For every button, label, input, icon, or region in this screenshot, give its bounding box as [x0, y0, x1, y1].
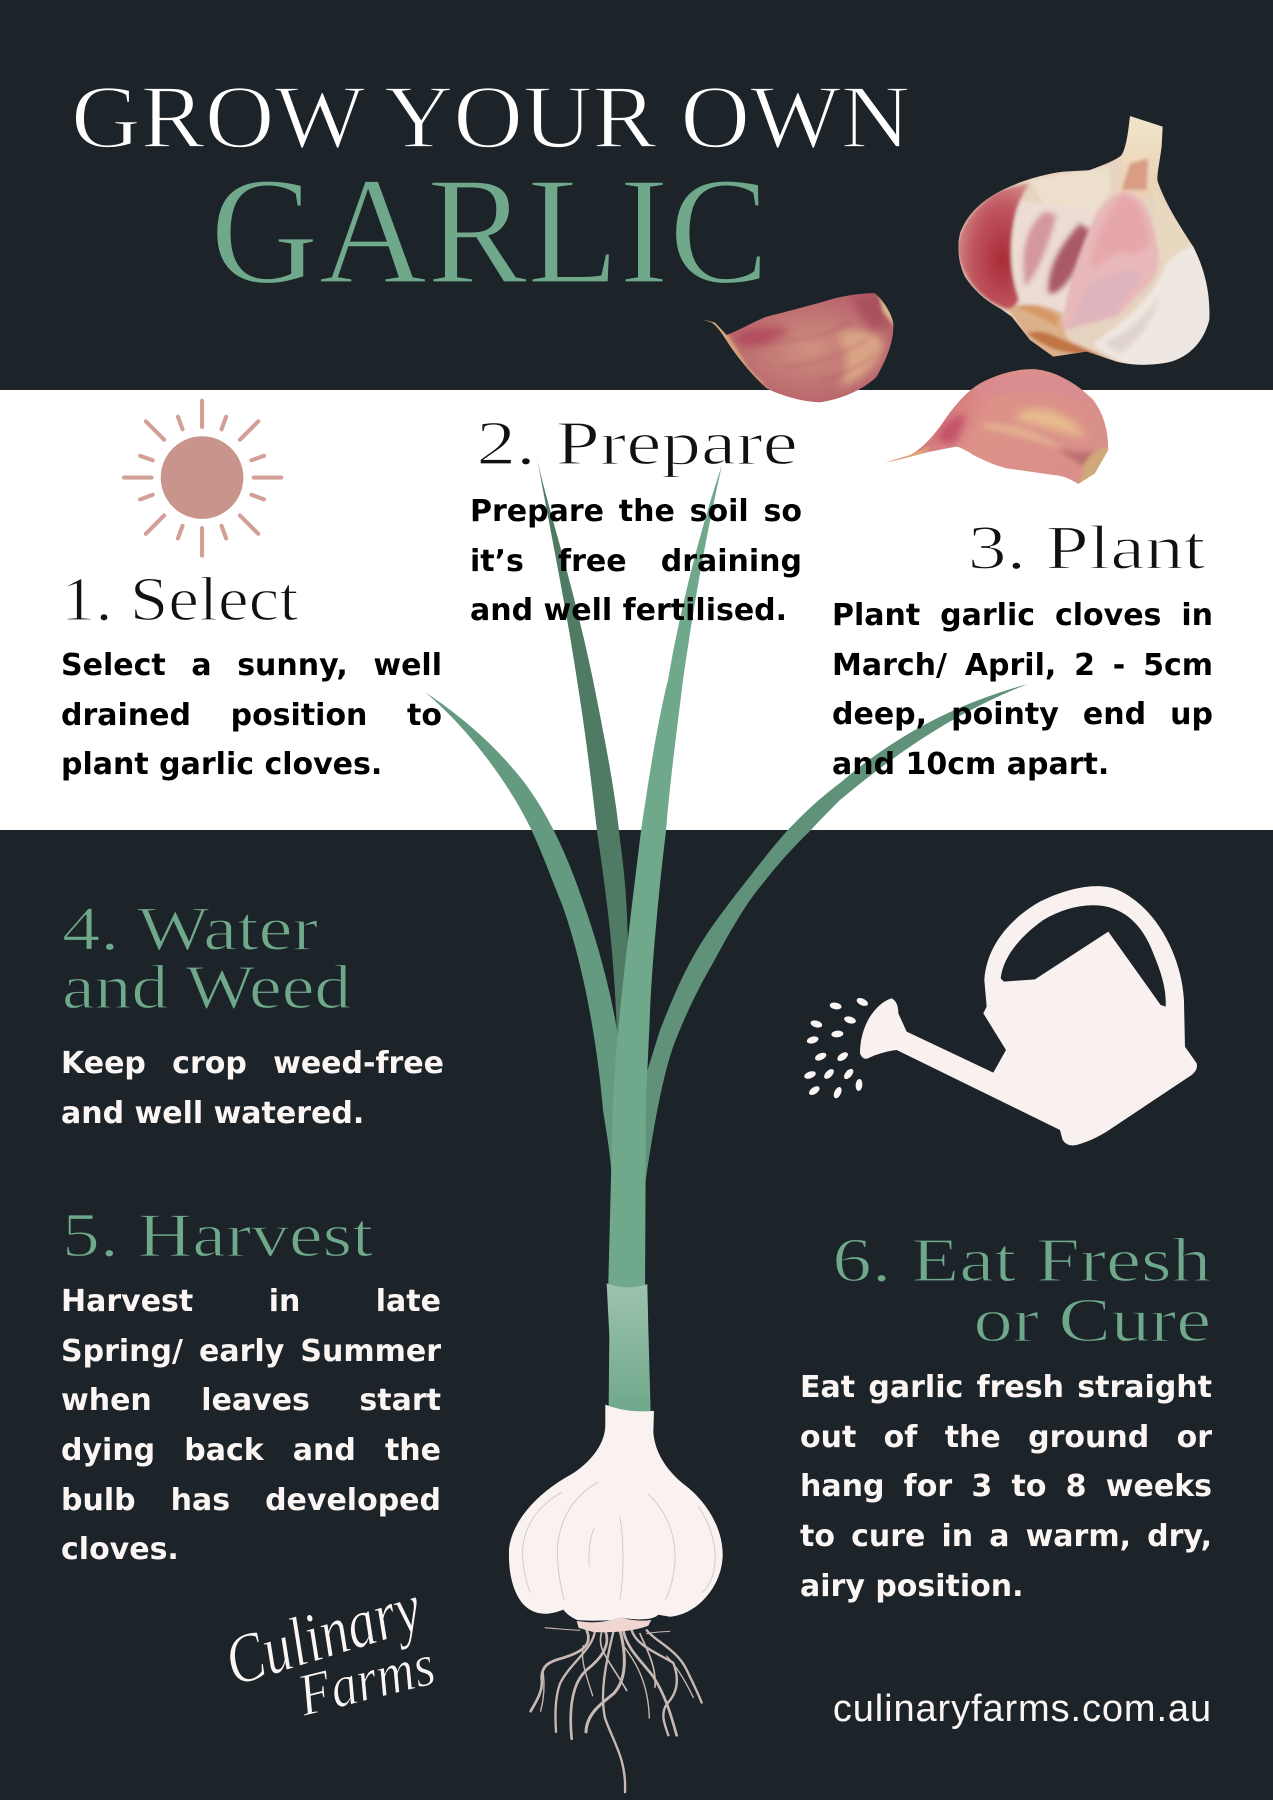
- title: [71, 68, 910, 316]
- text: step 2: it’s free draining: [470, 544, 802, 579]
- photo: left clove: [703, 293, 894, 402]
- logo: culinary farms script: Culinary: [216, 1569, 431, 1701]
- heading: water and weed: 4. Water: [62, 895, 318, 963]
- heading: harvest: 5. Harvest: [62, 1202, 373, 1270]
- heading: water and weed: [62, 895, 351, 1022]
- photo: garlic head: [958, 116, 1210, 365]
- icon: sun: [124, 401, 281, 556]
- text: step 2: Prepare the soil so: [470, 494, 802, 529]
- text: step 3: and 10cm apart.: [832, 747, 1109, 782]
- text: step 5: when leaves start: [61, 1383, 441, 1418]
- garlic plant leaves: [425, 457, 1028, 1295]
- step headings: [61, 410, 1211, 1355]
- text: step 6: out of the ground or: [800, 1420, 1212, 1455]
- text: step 6: hang for 3 to 8 weeks: [800, 1469, 1212, 1504]
- text: step 2: [470, 494, 802, 628]
- text: step 1: Select a sunny, well: [61, 648, 442, 683]
- heading: plant: 3. Plant: [968, 514, 1205, 582]
- text: step 5: dying back and the: [61, 1433, 441, 1468]
- text: step 5: Spring/ early Summer: [61, 1334, 441, 1369]
- text: step 5: cloves.: [61, 1532, 179, 1567]
- text: step 1: [61, 648, 442, 782]
- text: step 3: Plant garlic cloves in: [832, 598, 1213, 633]
- logo: culinary farms script: [216, 1569, 441, 1729]
- water drops: [803, 996, 869, 1099]
- garlic bulb with stem sleeve and roots: [509, 1283, 723, 1792]
- text: step 5: bulb has developed: [61, 1483, 441, 1518]
- photo: right clove: [885, 369, 1108, 484]
- text: step 6: [800, 1370, 1212, 1604]
- text: step 2: and well fertilised.: [470, 593, 787, 628]
- icon: watering can: [803, 886, 1197, 1145]
- text: step 6: Eat garlic fresh straight: [800, 1370, 1212, 1405]
- text: step 6: to cure in a warm, dry,: [800, 1519, 1212, 1554]
- text: step 4: Keep crop weed-free: [61, 1046, 444, 1081]
- title: GROW YOUR OWN: [71, 68, 910, 167]
- text: step 3: March/ April, 2 - 5cm: [832, 648, 1213, 683]
- text: step 1: drained position to: [61, 698, 442, 733]
- text: step 5: [61, 1284, 441, 1567]
- text: step 5: Harvest in late: [61, 1284, 441, 1319]
- heading: eat fresh or cure: [832, 1227, 1211, 1355]
- heading: select: 1. Select: [61, 566, 298, 634]
- text: step 3: [832, 598, 1213, 782]
- text: step 6: airy position.: [800, 1569, 1024, 1604]
- heading: eat fresh or cure: 6. Eat Fresh: [832, 1227, 1211, 1295]
- title: GARLIC: [210, 146, 769, 316]
- logo: culinary farms script: Farms: [290, 1631, 441, 1729]
- text: step 4: and well watered.: [61, 1096, 364, 1131]
- photo: cloves: [703, 293, 1108, 484]
- text: step 1: plant garlic cloves.: [61, 747, 382, 782]
- text: step 3: deep, pointy end up: [832, 697, 1213, 732]
- website url: culinaryfarms.com.au: [833, 1688, 1212, 1730]
- white band: [0, 390, 1273, 830]
- text: step 4: [61, 1046, 444, 1131]
- heading: water and weed: and Weed: [62, 954, 351, 1022]
- heading: eat fresh or cure: or Cure: [974, 1287, 1211, 1355]
- heading: prepare: 2. Prepare: [476, 410, 798, 478]
